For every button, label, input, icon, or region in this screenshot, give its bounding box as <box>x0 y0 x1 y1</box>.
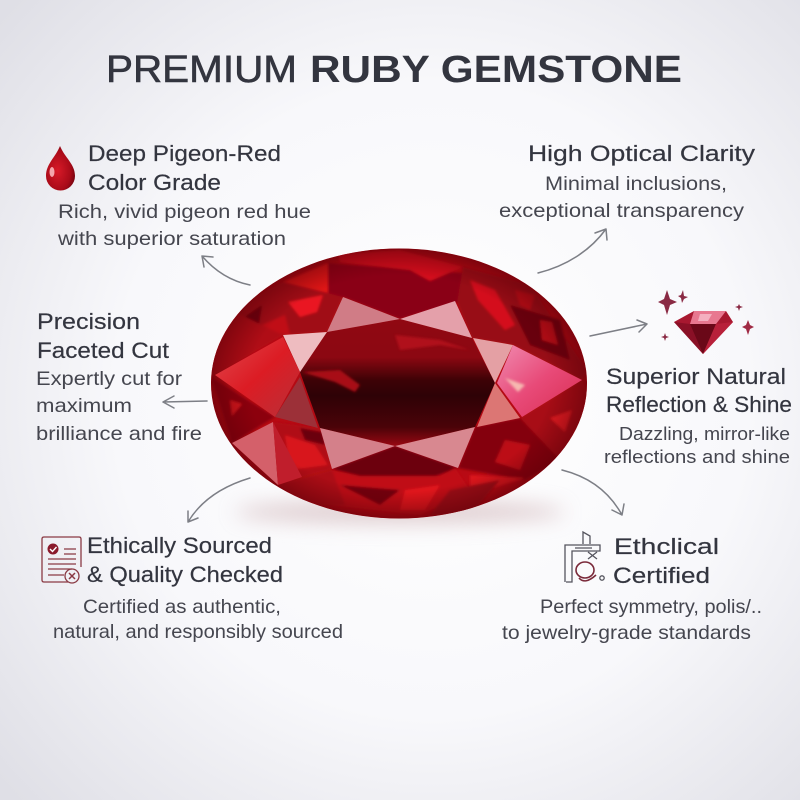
arrow: to reflection and shine <box>590 320 647 336</box>
table facet <box>300 319 495 446</box>
arrow: to ethically sourced <box>188 478 250 522</box>
panel: precision faceted cut: Faceted Cut <box>37 338 170 363</box>
panel: ethically sourced and quality checked <box>42 533 343 643</box>
arrow: to ethical certified <box>562 470 624 515</box>
panel: superior natural reflection and shine: reflections and shine <box>604 447 790 467</box>
panel: ethical certified: Certified <box>613 563 710 588</box>
arrow: to optical clarity <box>538 229 607 273</box>
panel: superior natural reflection and shine: Dazzling, mirror-like <box>619 424 790 444</box>
star facets <box>327 297 400 332</box>
title: RUBY GEMSTONE <box>310 49 682 91</box>
panel: ethical certified: Ethclical <box>614 534 719 559</box>
panel: ethically sourced and quality checked: Certified as authentic, <box>83 596 281 618</box>
panel: precision faceted cut: brilliance and fire <box>36 423 202 445</box>
panel: high optical clarity <box>499 141 756 222</box>
gem shadow <box>235 500 565 524</box>
title: PREMIUM <box>106 49 297 91</box>
icon: ruby drop <box>46 146 75 190</box>
icon: certificate document <box>42 537 81 583</box>
ruby gemstone <box>205 245 595 525</box>
panel: deep pigeon-red color grade: with superior saturation <box>57 228 286 250</box>
panel: high optical clarity: Minimal inclusions, <box>545 173 727 195</box>
panel: superior natural reflection and shine: Superior Natural <box>606 364 786 389</box>
panel: precision faceted cut: Precision <box>37 309 140 334</box>
icon: jewelry scale <box>565 532 604 582</box>
arrow: to faceted cut <box>163 396 207 408</box>
title <box>106 49 682 91</box>
panel: deep pigeon-red color grade: Rich, vivid pigeon red hue <box>58 201 311 223</box>
panel: high optical clarity: High Optical Clarity <box>528 141 756 166</box>
panel: ethically sourced and quality checked: Ethically Sourced <box>87 533 272 558</box>
panel: precision faceted cut <box>36 309 202 445</box>
panel: superior natural reflection and shine <box>604 364 792 467</box>
panel: precision faceted cut: Expertly cut for <box>36 368 183 390</box>
panel: ethically sourced and quality checked: natural, and responsibly sourced <box>53 621 343 643</box>
panel: superior natural reflection and shine: Reflection & Shine <box>606 392 792 417</box>
panel: high optical clarity: exceptional transparency <box>499 200 744 222</box>
panel: ethical certified: Perfect symmetry, polis/.. <box>540 596 762 618</box>
panel: precision faceted cut: maximum <box>36 395 132 417</box>
panel: deep pigeon-red color grade <box>46 141 311 250</box>
panel: ethical certified: to jewelry-grade standards <box>502 622 751 644</box>
panel: deep pigeon-red color grade: Deep Pigeon-Red <box>88 141 281 166</box>
panel: deep pigeon-red color grade: Color Grade <box>88 170 221 195</box>
icon: sparkling diamond <box>658 290 754 354</box>
panel: ethically sourced and quality checked: & Quality Checked <box>87 562 283 587</box>
panel: ethical certified <box>502 532 762 644</box>
arrow: to color grade <box>202 256 250 285</box>
